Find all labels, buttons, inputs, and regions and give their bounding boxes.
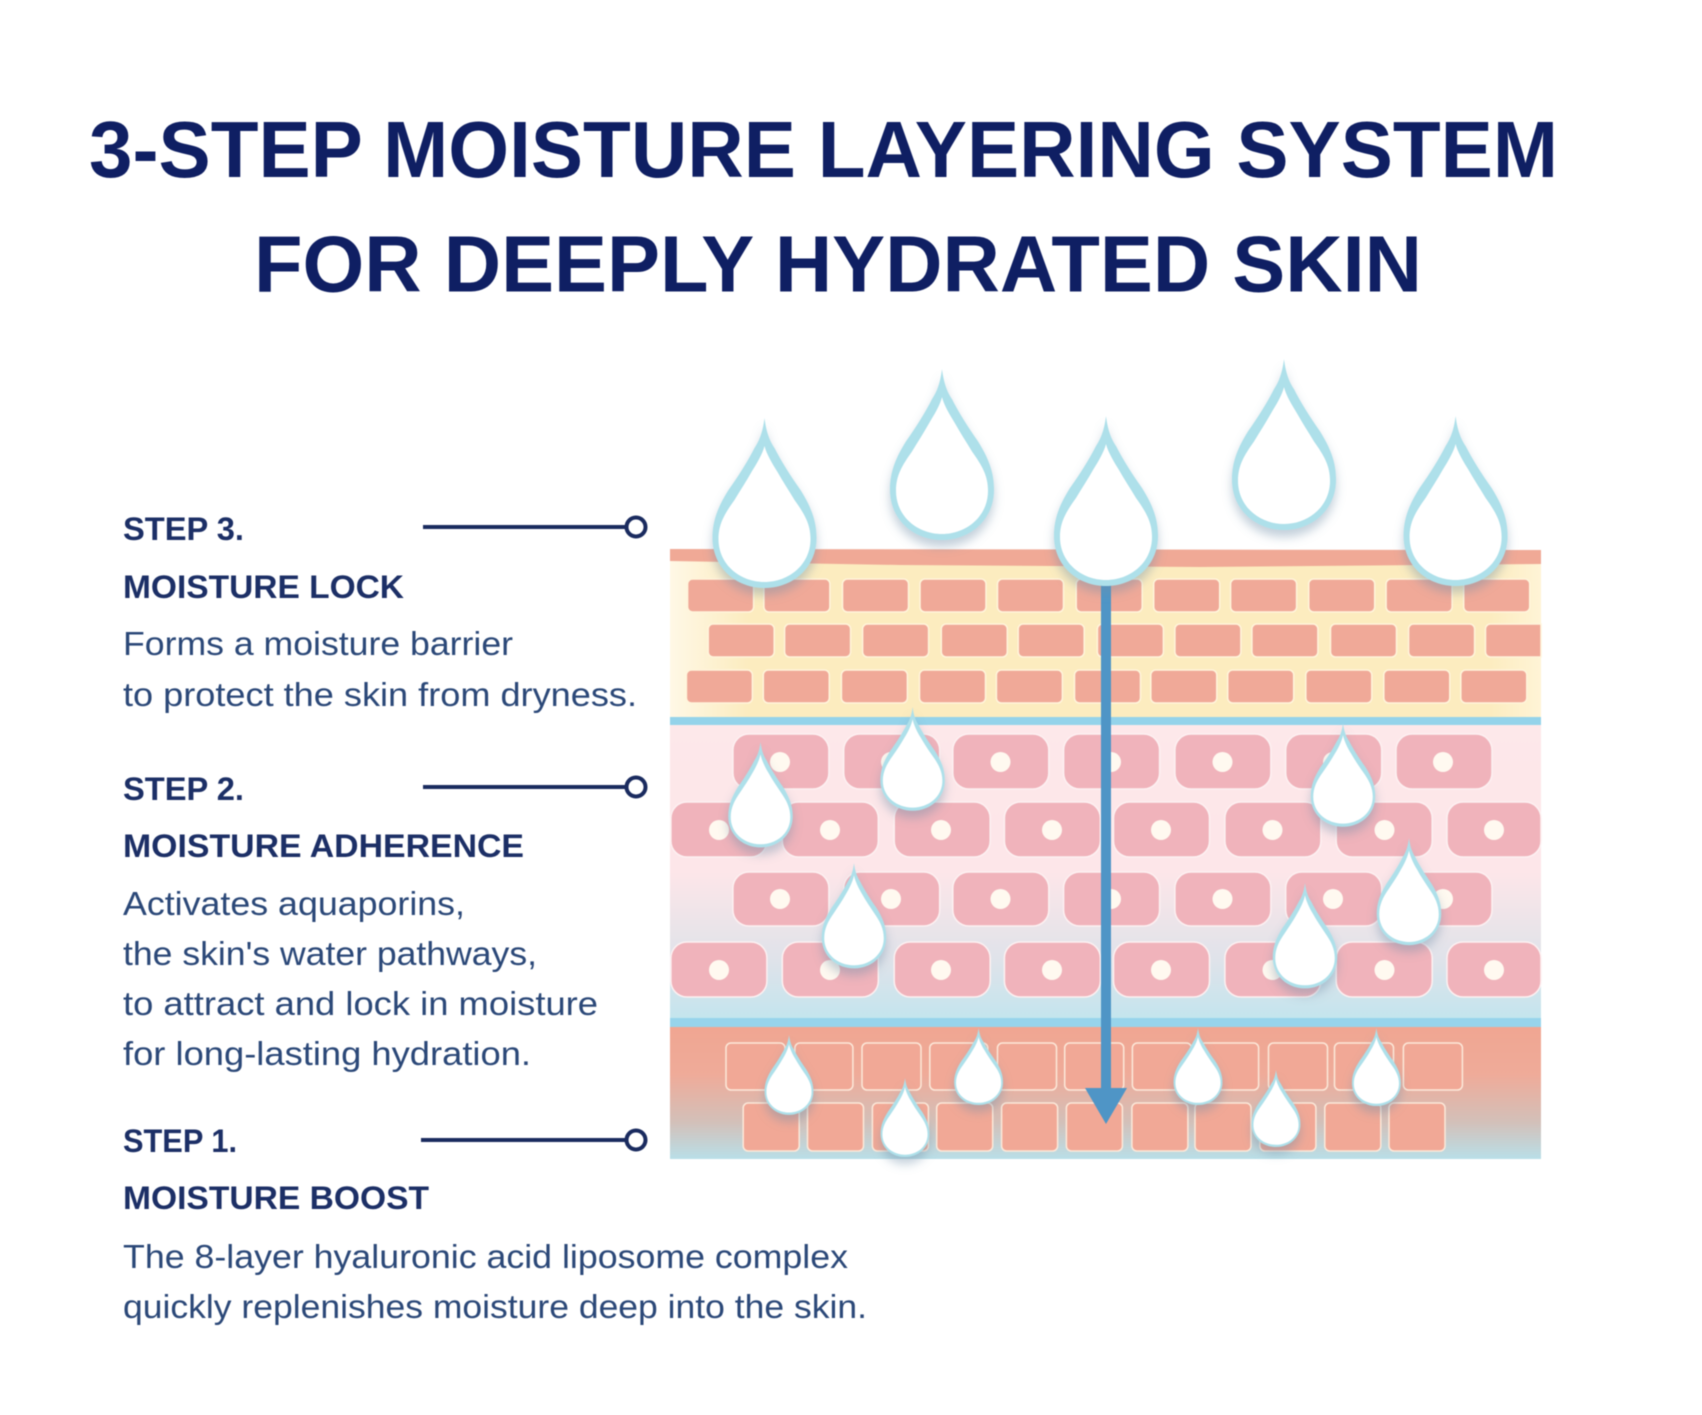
- step 2 text block: for long-lasting hydration.: [123, 1035, 531, 1072]
- layer: pink cell nuclei: [709, 752, 1504, 980]
- layer: lower orange background: [670, 1027, 1541, 1159]
- step 3 text block: [123, 511, 637, 713]
- title: 3-STEP MOISTURE LAYERING SYSTEM: [89, 105, 1558, 194]
- step 1 connector: [421, 1130, 646, 1150]
- step 2 connector: [423, 778, 646, 796]
- layer: upper brick cells: [686, 579, 1541, 703]
- step 2 text block: to attract and lock in moisture: [123, 985, 598, 1022]
- title: [89, 105, 1558, 308]
- step 2 text block: Activates aquaporins,: [123, 885, 465, 922]
- step 3 text block: to protect the skin from dryness.: [123, 676, 637, 713]
- step 3 text block: Forms a moisture barrier: [123, 625, 513, 662]
- step 1 text block: quickly replenishes moisture deep into the skin.: [123, 1288, 867, 1325]
- layer: pink cells: [671, 734, 1541, 997]
- title: FOR DEEPLY HYDRATED SKIN: [254, 220, 1422, 308]
- layer: pink middle background: [670, 725, 1541, 1020]
- step 1 text block: STEP 1.: [123, 1123, 237, 1159]
- panel: skin cross-section: [670, 359, 1541, 1159]
- icons: large surface water drops: [712, 359, 1508, 588]
- layer: lower cells: [726, 1043, 1462, 1151]
- step 2 text block: [123, 771, 598, 1072]
- icons: medium drops in pink layer: [728, 707, 1441, 988]
- step 1 text block: The 8-layer hyaluronic acid liposome complex: [123, 1238, 849, 1275]
- step 2 text block: STEP 2.: [123, 771, 244, 807]
- step 3 text block: MOISTURE LOCK: [123, 569, 404, 605]
- step 1 text block: MOISTURE BOOST: [123, 1180, 429, 1216]
- step 2 text block: MOISTURE ADHERENCE: [123, 828, 524, 864]
- step 2 text block: the skin's water pathways,: [123, 935, 537, 972]
- layer: lower blue membrane: [670, 1018, 1541, 1027]
- step 1 text block: [123, 1123, 867, 1325]
- layer: upper blue membrane: [670, 717, 1541, 725]
- icons: small drops in lower layer: [765, 1028, 1401, 1157]
- step 3 text block: STEP 3.: [123, 511, 244, 547]
- arrow: moisture penetration: [1085, 560, 1127, 1124]
- layer: stratum corneum top band: [670, 549, 1541, 720]
- step 3 connector: [423, 518, 646, 536]
